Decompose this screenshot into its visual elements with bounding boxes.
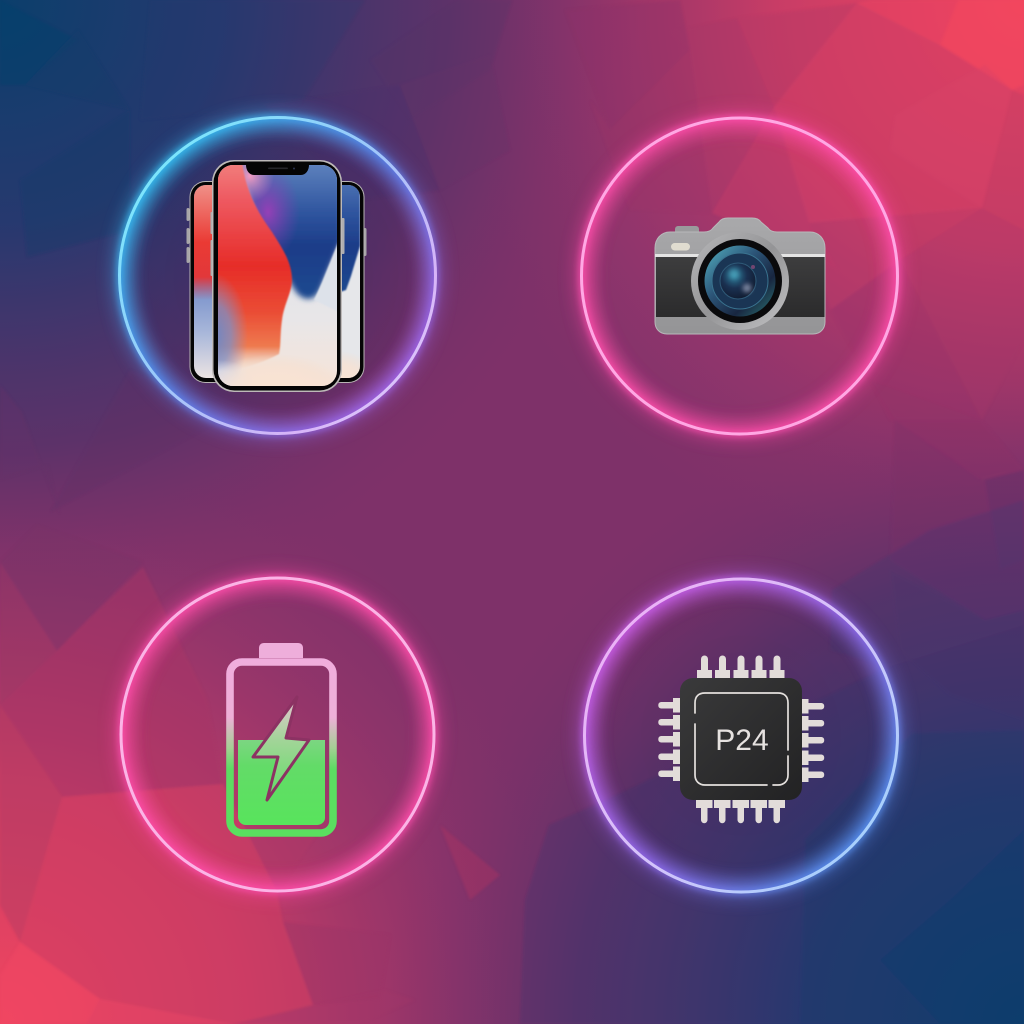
circle ring: pink — [121, 578, 434, 891]
icon: camera — [655, 218, 825, 334]
circle ring: pink — [582, 118, 898, 434]
circle ring: violet to blue — [584, 579, 898, 892]
notch — [246, 165, 309, 175]
back phone right — [338, 181, 366, 383]
circle ring: cyan to violet — [120, 118, 436, 434]
wallpaper: red — [214, 160, 292, 372]
chip inner outline — [695, 693, 788, 785]
chip pins — [658, 656, 824, 823]
panel: phone circle — [120, 118, 898, 892]
panel: chip circle — [584, 579, 898, 892]
icon: charging battery — [230, 643, 333, 833]
camera lens — [691, 232, 789, 330]
panel: battery circle — [121, 578, 434, 891]
lightning bolt — [253, 697, 309, 800]
panel: camera circle — [582, 118, 898, 434]
chip label: P24 — [715, 724, 769, 757]
back phone left — [186, 181, 216, 383]
icon: three smartphones — [186, 160, 366, 392]
wallpaper: blue — [242, 165, 337, 304]
front phone — [210, 160, 344, 392]
icon: processor chip — [658, 656, 824, 823]
